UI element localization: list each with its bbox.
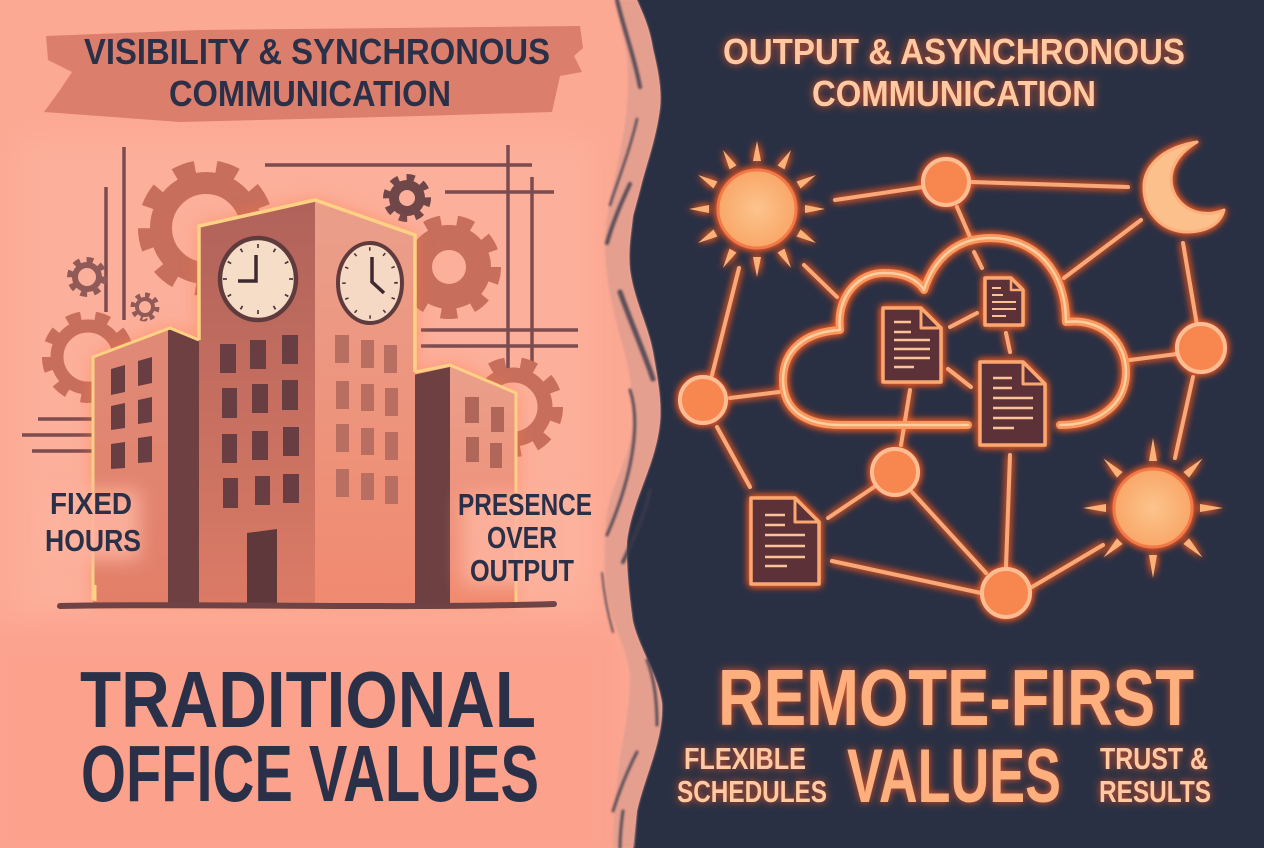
network connectors (712, 182, 1197, 593)
network diagram (680, 141, 1225, 617)
title: traditional office values: OFFICE VALUES (81, 729, 539, 818)
document centre right (980, 362, 1045, 445)
illustration: gears and scaffold lines (22, 145, 578, 451)
documents (751, 278, 1045, 584)
label: trust and results: TRUST & (1100, 741, 1208, 776)
label backing patches (40, 490, 587, 585)
crescent moon (1144, 142, 1224, 232)
left wing (93, 328, 204, 603)
illustration: office building (40, 200, 587, 606)
title: traditional office values (80, 655, 539, 818)
label: presence over output: OVER (487, 520, 557, 555)
network nodes (680, 159, 1225, 617)
label: flexible schedules (677, 741, 827, 809)
label: presence over output: OUTPUT (470, 553, 574, 588)
label: fixed hours: FIXED (50, 486, 132, 521)
label: fixed hours: HOURS (45, 523, 141, 558)
label: trust and results (1099, 741, 1211, 809)
label: flexible schedules: SCHEDULES (677, 774, 827, 809)
label: fixed hours (45, 486, 141, 558)
title: traditional office values: TRADITIONAL (80, 655, 536, 744)
heading: output and asynchronous communication (723, 31, 1185, 114)
small dark gear (387, 178, 427, 218)
small outline gears (70, 260, 157, 319)
document centre left (883, 308, 941, 382)
brush dark streaks (602, 0, 657, 848)
banner heading text: COMMUNICATION (169, 73, 451, 114)
heading: output and asynchronous communication: OUTPUT & ASYNCHRONOUS (723, 31, 1185, 72)
title: remote-first values (718, 653, 1194, 819)
label: flexible schedules: FLEXIBLE (684, 741, 806, 776)
label: trust and results: RESULTS (1099, 774, 1211, 809)
sun bottom right (1083, 438, 1223, 578)
tower (199, 200, 415, 603)
panel: remote-first background with brushed wavy divider (602, 0, 1264, 848)
large gear top (145, 167, 267, 289)
banner heading text (84, 31, 550, 114)
dark panel (627, 0, 1264, 848)
ground (60, 604, 554, 606)
clock right showing 4 o'clock (338, 243, 402, 323)
right gear (403, 221, 495, 313)
door (247, 529, 277, 603)
document links (948, 313, 1010, 387)
building halo (93, 200, 516, 602)
clock left showing 9 o'clock (220, 238, 296, 320)
scaffold lines (22, 145, 578, 451)
document lower left (751, 498, 819, 584)
right wing (413, 365, 516, 603)
panel: traditional office background (0, 0, 665, 848)
cloud outline (783, 238, 1126, 425)
lower right gear (469, 363, 557, 451)
brush band (605, 0, 662, 848)
left large gear (47, 316, 129, 398)
left wing lower edge (94, 585, 96, 601)
label: presence over output (458, 487, 592, 588)
sun top left (689, 141, 825, 277)
banner heading text: VISIBILITY & SYNCHRONOUS (84, 31, 550, 72)
heading: output and asynchronous communication: COMMUNICATION (812, 73, 1096, 114)
label: presence over output: PRESENCE (458, 487, 592, 522)
cloud highlight (783, 238, 1126, 425)
document top (985, 278, 1023, 325)
brush banner (44, 26, 583, 122)
heading: visibility and synchronous communication (44, 26, 583, 122)
title: remote-first values: VALUES (847, 734, 1061, 819)
